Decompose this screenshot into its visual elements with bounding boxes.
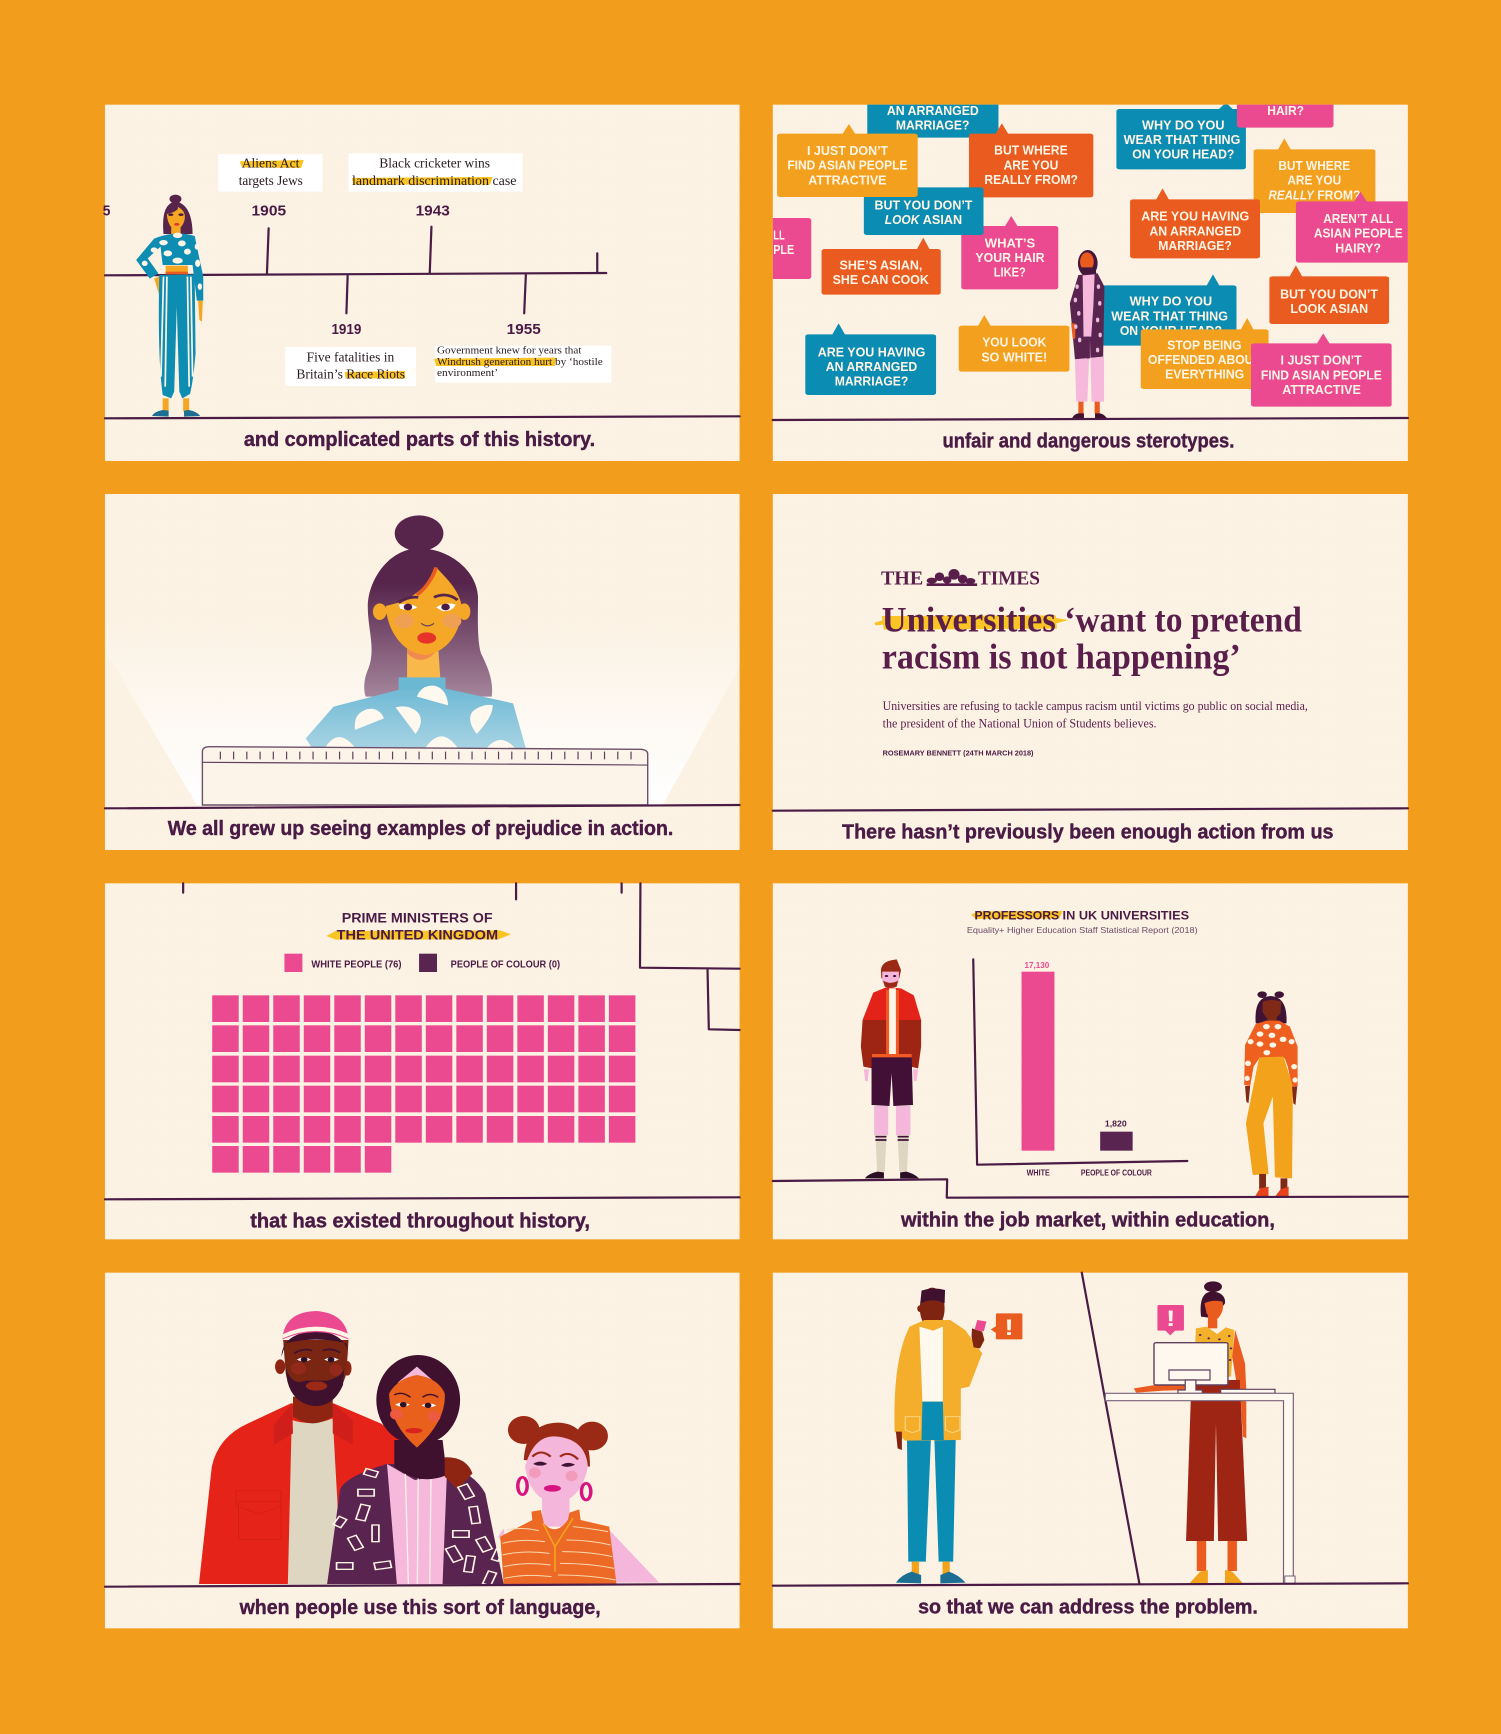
bubble: i just don't find asian people attractive: I JUST DON’T bbox=[807, 145, 888, 158]
bubble: stop being offended: EVERYTHING bbox=[1165, 368, 1244, 382]
bubble: what's your hair like bbox=[961, 216, 1058, 289]
bubble: are you having an arranged marriage, lower left: MARRIAGE? bbox=[835, 375, 908, 389]
headline card: Aliens Act bbox=[218, 154, 322, 192]
ground line bbox=[773, 418, 1408, 420]
headline card: Black cricketer bbox=[349, 153, 522, 192]
bubble: cropped pink at left edge bbox=[773, 218, 811, 279]
transition lines at top of frame bbox=[183, 883, 740, 1030]
bubble: aren't all asian people hairy: AREN’T ALL bbox=[1323, 213, 1393, 226]
bubble: cropped pink at left edge: PLE bbox=[773, 244, 794, 257]
bar chart: PEOPLE OF COLOUR bbox=[1081, 1169, 1152, 1177]
bubble: but you don't look asian, right: BUT YOU DON’T bbox=[1280, 288, 1378, 302]
bubble: an arranged marriage top: MARRIAGE? bbox=[896, 119, 969, 133]
headline card: Race Riots bbox=[285, 347, 416, 386]
figure: man in red jacket and shorts bbox=[861, 959, 921, 1178]
headline card: Race Riots: Five fatalities in bbox=[307, 350, 394, 365]
standfirst bbox=[883, 700, 1308, 731]
bubble: but where are you really from, right: ARE YOU bbox=[1287, 174, 1341, 188]
ground line bbox=[773, 808, 1408, 811]
timeline year labels: 1955 bbox=[507, 321, 541, 337]
chart title: Equality+ Higher Education Staff Statistical Report (2018) bbox=[967, 926, 1198, 936]
bubble: i just don't find asian people attractive: ATTRACTIVE bbox=[808, 174, 887, 188]
headline text: ‘want to pretend bbox=[1064, 599, 1302, 639]
bubble: but you don't look asian: BUT YOU DON’T bbox=[875, 199, 972, 213]
headline card: Black cricketer: Black cricketer wins bbox=[379, 156, 490, 171]
The Times masthead: TIMES bbox=[978, 567, 1040, 589]
caption: unfair and dangerous sterotypes. bbox=[942, 429, 1234, 453]
panel: timeline of history bbox=[103, 105, 740, 461]
figure: man in red jacket and pink cap bbox=[199, 1311, 402, 1584]
standfirst: the president of the National Union of Students believes. bbox=[883, 717, 1157, 731]
legend bbox=[284, 954, 560, 972]
headline text: racism is not happening’ bbox=[882, 636, 1241, 676]
bubble: are you having an arranged marriage, centre bbox=[1130, 188, 1260, 258]
dividing line bbox=[1082, 1273, 1139, 1584]
bubble: i just don't find asian people attractive bbox=[777, 124, 918, 197]
bar chart: 17,130 bbox=[1025, 961, 1049, 971]
chart title bbox=[967, 909, 1198, 936]
panel: The Times headline bbox=[773, 494, 1408, 850]
panel: woman lit by laptop bbox=[105, 494, 740, 850]
bubble: hair, cropped top: HAIR? bbox=[1267, 105, 1304, 118]
timeline year labels bbox=[103, 203, 541, 337]
caption: and complicated parts of this history. bbox=[244, 428, 595, 451]
bubble: why do you wear that thing, top: WHY DO YOU bbox=[1142, 119, 1225, 133]
bubble: but where are you really from, right bbox=[1254, 138, 1375, 213]
alert icon: phone notification: ! bbox=[1004, 1316, 1014, 1340]
bar chart: 1,820 bbox=[1105, 1119, 1127, 1129]
ground line bbox=[105, 416, 740, 418]
alert icon: computer notification: ! bbox=[1166, 1307, 1175, 1331]
bubble: are you having an arranged marriage, centre: MARRIAGE? bbox=[1158, 240, 1232, 253]
bubble: i just don't find asian people attractive, right: I JUST DON’T bbox=[1281, 354, 1362, 368]
bubble: but where are you really from: BUT WHERE bbox=[994, 144, 1068, 158]
standfirst: Universities are refusing to tackle campus racism until victims go public on social media, bbox=[883, 700, 1308, 713]
bubble: but where are you really from: REALLY FROM? bbox=[984, 174, 1078, 187]
figure: woman in teal tracksuit bbox=[136, 195, 203, 417]
bubble: but where are you really from bbox=[969, 123, 1093, 197]
panel: speech bubbles of stereotypes bbox=[773, 105, 1408, 461]
headline card: Race Riots: Britain’s Race Riots bbox=[296, 367, 405, 382]
headline card: Black cricketer: landmark discrimination case bbox=[352, 174, 517, 188]
bubble: but where are you really from: ARE YOU bbox=[1004, 159, 1058, 173]
The Times masthead: THE bbox=[881, 567, 923, 589]
headline card: Windrush bbox=[434, 344, 611, 383]
figure: man with phone and yellow coat bbox=[894, 1288, 986, 1583]
chart title: IN UK UNIVERSITIES bbox=[1063, 909, 1189, 923]
panel: three people portrait bbox=[105, 1273, 740, 1628]
caption: There hasn’t previously been enough action from us bbox=[842, 820, 1334, 844]
bubble: cropped pink at left edge: LL bbox=[773, 229, 785, 243]
alert icon: computer notification bbox=[1157, 1305, 1184, 1335]
The Times masthead bbox=[881, 567, 1040, 589]
headline card: Windrush: Windrush generation hurt by ‘hostile bbox=[437, 355, 603, 368]
panel: prime ministers chart bbox=[105, 883, 740, 1239]
bubble: are you having an arranged marriage, lower left: AN ARRANGED bbox=[826, 361, 917, 374]
bubble: are you having an arranged marriage, centre: ARE YOU HAVING bbox=[1141, 210, 1249, 224]
timeline year labels: 1943 bbox=[416, 203, 450, 219]
figure: woman in hijab and patterned coat bbox=[327, 1355, 504, 1586]
bubble: she's asian she can cook bbox=[822, 238, 941, 295]
bubble: but you don't look asian, right bbox=[1269, 265, 1389, 324]
figure: woman with hair buns and orange top bbox=[498, 1416, 659, 1584]
figure: woman in polka dot top and yellow trousers bbox=[1244, 991, 1298, 1197]
bubble: an arranged marriage top bbox=[867, 105, 998, 138]
bubble: stop being offended: OFFENDED ABOUT bbox=[1148, 354, 1261, 367]
bubble: an arranged marriage top: AN ARRANGED bbox=[887, 105, 979, 118]
headline text: Universities bbox=[882, 599, 1056, 639]
bubble: she's asian she can cook: SHE’S ASIAN, bbox=[839, 259, 922, 273]
byline: ROSEMARY BENNETT (24TH MARCH 2018) bbox=[883, 749, 1034, 757]
figure: woman with hair bun bbox=[306, 515, 526, 748]
bubble: aren't all asian people hairy: ASIAN PEOPLE bbox=[1314, 227, 1403, 241]
timeline year labels: 1905 bbox=[252, 203, 286, 219]
bubble: what's your hair like: YOUR HAIR bbox=[975, 252, 1045, 265]
headline card: Windrush: Government knew for years that bbox=[437, 344, 582, 356]
timeline year labels: 1919 bbox=[331, 321, 361, 337]
ground line bbox=[105, 805, 740, 808]
legend: WHITE PEOPLE (76) bbox=[311, 960, 402, 970]
bubble: why do you wear that thing, top bbox=[1116, 105, 1246, 169]
chart title: PROFESSORS bbox=[975, 909, 1059, 923]
caption: We all grew up seeing examples of prejudice in action. bbox=[168, 817, 673, 840]
headline text bbox=[882, 599, 1302, 676]
chart title: PRIME MINISTERS OF bbox=[342, 910, 493, 926]
bubble: are you having an arranged marriage, lower left bbox=[805, 323, 936, 395]
panel: professors bar chart bbox=[773, 883, 1408, 1239]
caption: within the job market, within education, bbox=[900, 1208, 1275, 1232]
headline card: Aliens Act: targets Jews bbox=[239, 174, 303, 188]
figure: woman in hijab bbox=[1070, 250, 1107, 418]
figure: woman at standing desk bbox=[1134, 1281, 1247, 1583]
panel: people reporting incidents bbox=[773, 1273, 1408, 1628]
bubble: you look so white: SO WHITE! bbox=[981, 351, 1047, 365]
laptop light cone bbox=[105, 613, 740, 805]
bubble: i just don't find asian people attractive: FIND ASIAN PEOPLE bbox=[787, 159, 908, 173]
bubble: why do you wear that thing, lower: WEAR THAT THING bbox=[1111, 310, 1228, 324]
chart title: THE UNITED KINGDOM bbox=[337, 927, 498, 943]
bubble: but where are you really from, right: REALLY bbox=[1269, 189, 1315, 203]
bubble: but you don't look asian bbox=[864, 187, 984, 235]
computer and standing desk bbox=[1105, 1343, 1295, 1583]
caption: that has existed throughout history, bbox=[250, 1209, 590, 1233]
bubble: are you having an arranged marriage, lower left: ARE YOU HAVING bbox=[818, 346, 925, 360]
bubble: but you don't look asian, right: LOOK ASIAN bbox=[1290, 303, 1368, 316]
bubble: but where are you really from, right: FROM? bbox=[1317, 189, 1361, 203]
chart title bbox=[326, 910, 511, 943]
bubble: you look so white bbox=[959, 315, 1069, 372]
timeline year labels: 5 bbox=[103, 203, 111, 219]
ground line bbox=[105, 1197, 740, 1199]
ground line bbox=[773, 1583, 1408, 1586]
caption: so that we can address the problem. bbox=[918, 1595, 1258, 1619]
caption: when people use this sort of language, bbox=[239, 1596, 601, 1619]
bubble: aren't all asian people hairy bbox=[1296, 192, 1408, 263]
bar chart bbox=[973, 959, 1187, 1177]
headline card: Aliens Act: Aliens Act bbox=[242, 156, 300, 171]
bubble: are you having an arranged marriage, centre: AN ARRANGED bbox=[1149, 225, 1241, 239]
bubble: but you don't look asian: LOOK bbox=[885, 214, 921, 227]
headline card: Windrush: environment’ bbox=[437, 366, 498, 379]
bubble: but you don't look asian: ASIAN bbox=[923, 214, 962, 227]
bubble: why do you wear that thing, top: WEAR THAT THING bbox=[1124, 134, 1240, 147]
bubble: aren't all asian people hairy: HAIRY? bbox=[1335, 242, 1381, 256]
bar chart: WHITE bbox=[1027, 1169, 1050, 1177]
bubble: stop being offended: STOP BEING bbox=[1167, 339, 1242, 353]
bubble: hair, cropped top bbox=[1237, 105, 1334, 128]
legend: PEOPLE OF COLOUR (0) bbox=[451, 960, 560, 970]
bubble: but where are you really from, right: BUT WHERE bbox=[1278, 160, 1350, 173]
stepped ground line bbox=[773, 1179, 1408, 1198]
bubble: why do you wear that thing, lower bbox=[1102, 274, 1236, 346]
bubble: why do you wear that thing, lower: WHY DO YOU bbox=[1130, 295, 1212, 309]
bubble: what's your hair like: WHAT’S bbox=[985, 237, 1035, 251]
bubble: i just don't find asian people attractive, right: FIND ASIAN PEOPLE bbox=[1261, 369, 1382, 383]
bubble: you look so white: YOU LOOK bbox=[982, 336, 1047, 350]
bubble: i just don't find asian people attractive, right bbox=[1251, 333, 1392, 407]
alert icon: phone notification bbox=[991, 1313, 1022, 1340]
waffle chart: 76 squares bbox=[212, 995, 635, 1173]
ground line bbox=[105, 1584, 740, 1587]
timeline axis with ticks bbox=[105, 227, 606, 313]
bubble: i just don't find asian people attractive, right: ATTRACTIVE bbox=[1282, 384, 1361, 397]
bubble: what's your hair like: LIKE? bbox=[994, 266, 1026, 280]
laptop outline bbox=[202, 747, 648, 805]
bubble: why do you wear that thing, top: ON YOUR HEAD? bbox=[1132, 148, 1234, 162]
highlight brush stroke bbox=[875, 615, 1069, 630]
bubble: stop being offended bbox=[1141, 318, 1269, 389]
bubble: she's asian she can cook: SHE CAN COOK bbox=[833, 274, 929, 287]
bubble: why do you wear that thing, lower: ON YOUR HEAD? bbox=[1120, 325, 1222, 338]
